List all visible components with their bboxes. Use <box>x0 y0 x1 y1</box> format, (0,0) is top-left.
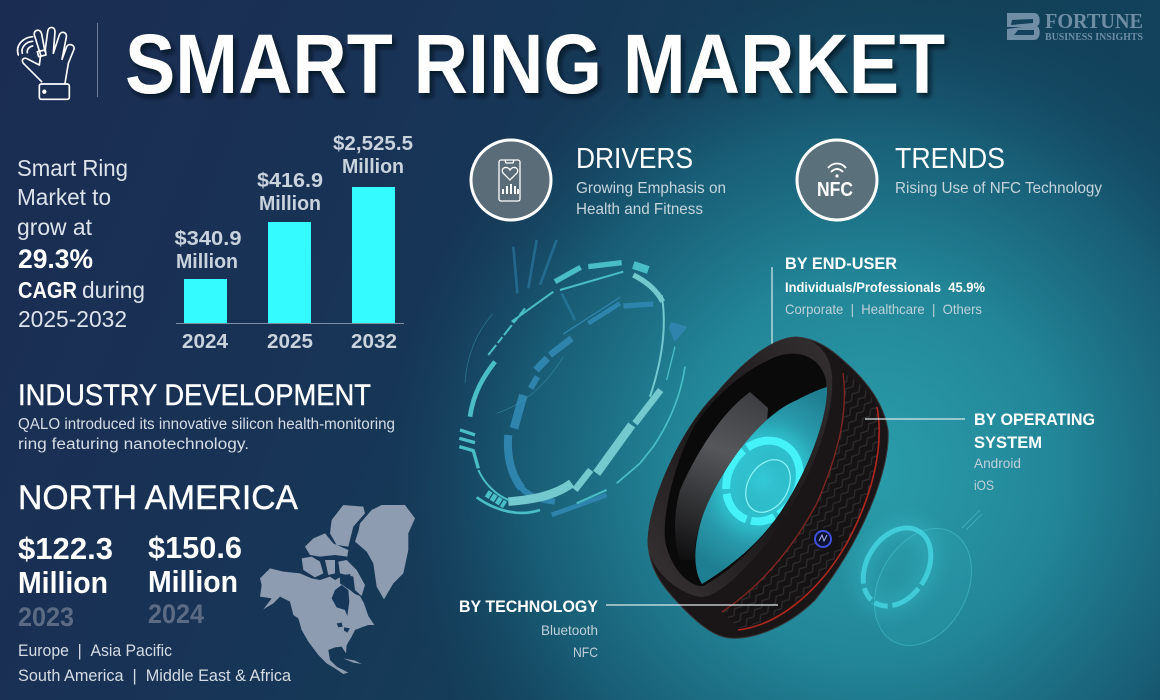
industry development: INDUSTRY DEVELOPMENT <box>18 379 371 412</box>
bar chart: $2,525.5 <box>333 133 413 155</box>
front face <box>648 337 832 597</box>
logo: Fortune Business Insights <box>1007 9 1143 43</box>
bar chart <box>174 133 413 353</box>
ring <box>648 337 888 638</box>
icon: hand with smart ring <box>18 27 74 99</box>
icon: NFC: NFC <box>817 179 853 201</box>
bar chart: Million <box>342 156 404 178</box>
callout: by technology: NFC <box>573 644 598 660</box>
drivers text: DRIVERS <box>576 143 693 175</box>
north america stats <box>18 479 298 685</box>
callout: by technology: BY TECHNOLOGY <box>459 597 599 616</box>
inner metallic strip <box>675 392 768 560</box>
callout: by operating system: Android <box>974 455 1021 471</box>
north america stats: Million <box>18 565 108 600</box>
text block: CAGR: 2025-2032 <box>18 306 127 332</box>
drivers text <box>576 143 726 218</box>
logo: Fortune Business Insights: BUSINESS INSIGHTS <box>1045 32 1143 43</box>
title: SMART RING MARKET <box>125 17 945 111</box>
callout: by operating system <box>865 410 1095 493</box>
industry development <box>18 379 395 453</box>
bar chart: 2025 <box>267 331 313 353</box>
callout: by technology: Bluetooth <box>541 622 598 638</box>
callout: by technology <box>459 597 778 660</box>
bar chart: Million <box>259 193 321 215</box>
hole <box>695 387 827 584</box>
text block: CAGR: Smart Ring <box>17 155 128 181</box>
divider <box>96 23 98 97</box>
trends text <box>895 143 1102 197</box>
blue inner ring <box>508 240 686 515</box>
light right arc <box>508 275 664 502</box>
text block: CAGR: CAGR <box>18 277 77 303</box>
hologram in hole <box>713 426 810 536</box>
text block: CAGR: grow at <box>17 214 93 240</box>
callout: by operating system: BY OPERATING <box>974 410 1095 429</box>
decorative HUD rings <box>459 240 686 515</box>
icon: NFC <box>797 140 877 220</box>
faint arcs <box>465 314 563 413</box>
north america stats: 2023 <box>18 602 74 632</box>
north america stats: $150.6 <box>148 530 242 565</box>
inner surface <box>665 354 826 586</box>
bar chart: 2024 <box>182 331 229 353</box>
drivers text: Health and Fitness <box>576 201 703 218</box>
bar chart: Million <box>176 251 238 273</box>
map: North America <box>260 505 415 674</box>
text block: CAGR: during <box>82 277 145 303</box>
callout: by operating system: iOS <box>974 477 994 493</box>
logo: Fortune Business Insights: FORTUNE <box>1045 9 1143 33</box>
textured band <box>722 373 879 628</box>
north america stats: South America | Middle East & Africa <box>18 666 292 685</box>
callout: by end-user: BY END-USER <box>785 254 897 273</box>
small glow hologram <box>849 510 991 662</box>
teal outer ring <box>459 263 685 513</box>
trends text: TRENDS <box>895 143 1005 175</box>
callout: by end-user: Individuals/Professionals 45.9% <box>785 280 985 295</box>
drivers text: Growing Emphasis on <box>576 180 726 197</box>
bar chart: 2032 <box>351 331 397 353</box>
icon: drivers phone <box>471 140 551 220</box>
callout: by operating system: SYSTEM <box>974 433 1042 452</box>
industry development: ring featuring nanotechnology. <box>18 436 249 453</box>
north america stats: 2024 <box>148 599 204 629</box>
north america stats: Million <box>148 564 238 599</box>
bar chart: $340.9 <box>174 228 242 250</box>
text block: CAGR <box>17 155 145 332</box>
bar chart: $416.9 <box>257 170 323 192</box>
trends text: Rising Use of NFC Technology <box>895 180 1102 197</box>
ring silhouette <box>648 337 888 638</box>
north america stats: Europe | Asia Pacific <box>18 641 172 660</box>
text block: CAGR: 29.3% <box>18 244 93 274</box>
north america stats: NORTH AMERICA <box>18 479 298 517</box>
industry development: QALO introduced its innovative silicon health-monitoring <box>18 416 395 433</box>
button <box>815 528 839 552</box>
callout: by end-user <box>772 254 985 365</box>
callout: by end-user: Corporate | Healthcare | Others <box>785 301 982 317</box>
text block: CAGR: Market to <box>17 184 111 210</box>
north america stats: $122.3 <box>18 531 113 566</box>
